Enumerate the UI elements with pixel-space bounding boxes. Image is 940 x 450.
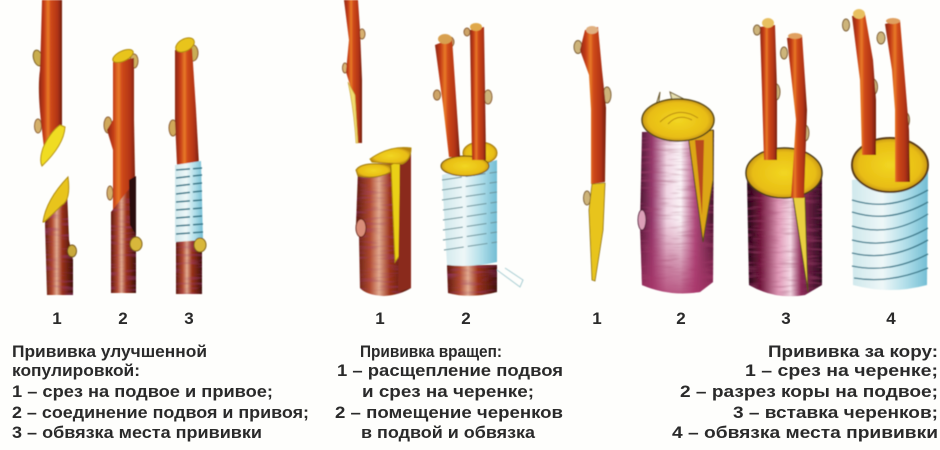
caption: bark graft: 1 – срез на черенке; [745,362,938,380]
caption: improved copulation: 2 – соединение подвоя и привоя; [12,404,309,422]
caption: bark graft: 2 – разрез коры на подвое; [680,383,938,401]
split rootstock, cleft graft step 1 [356,147,411,296]
caption: improved copulation: 1 – срез на подвое и привое; [12,383,273,401]
stage numbers: 3 [184,309,194,328]
stage numbers: 2 [118,309,128,328]
stage numbers: 3 [781,309,791,328]
scion cut, improved copulation step 1 [32,0,65,166]
caption: improved copulation: Прививка улучшенной [12,343,207,361]
stage numbers: 2 [676,309,686,328]
bound rootstock with scions, bark graft step 4 [842,9,928,290]
stage numbers: 1 [375,309,385,328]
joined graft, improved copulation step 2 [104,47,142,293]
scion, bark graft step 1 [574,26,611,281]
inserted scions in rootstock, bark graft step 3 [746,18,822,296]
caption: bark graft: Прививка за кору: [768,343,938,361]
caption: improved copulation: копулировкой: [12,362,140,380]
rootstock cut, improved copulation step 1 [43,177,76,295]
bound graft, improved copulation step 3 [169,35,206,294]
stage numbers [52,309,896,328]
caption: cleft graft: 1 – расщепление подвоя [337,362,563,380]
caption: improved copulation [12,343,309,442]
stage numbers: 1 [52,309,62,328]
stage numbers: 4 [886,309,896,328]
caption: cleft graft: Прививка вращеп: [360,343,502,361]
illustration: grafting stages [32,0,928,296]
rootstock with bark flap, bark graft step 2 [638,92,714,293]
caption: bark graft: 4 – обвязка места прививки [672,424,938,442]
caption: cleft graft: в подвой и обвязка [361,424,536,442]
caption: bark graft [672,343,938,442]
caption: improved copulation: 3 – обвязка места прививки [12,424,262,442]
stage numbers: 1 [592,309,602,328]
caption: cleft graft: 2 – помещение черенков [335,404,563,422]
grafted scions with binding, cleft graft step 2 [434,23,523,296]
caption: bark graft: 3 – вставка черенков; [733,404,938,422]
caption: cleft graft: и срез на черенке; [362,383,534,401]
scion, cleft graft step 1 [342,0,365,143]
caption: cleft graft [335,343,563,442]
stage numbers: 2 [461,309,471,328]
